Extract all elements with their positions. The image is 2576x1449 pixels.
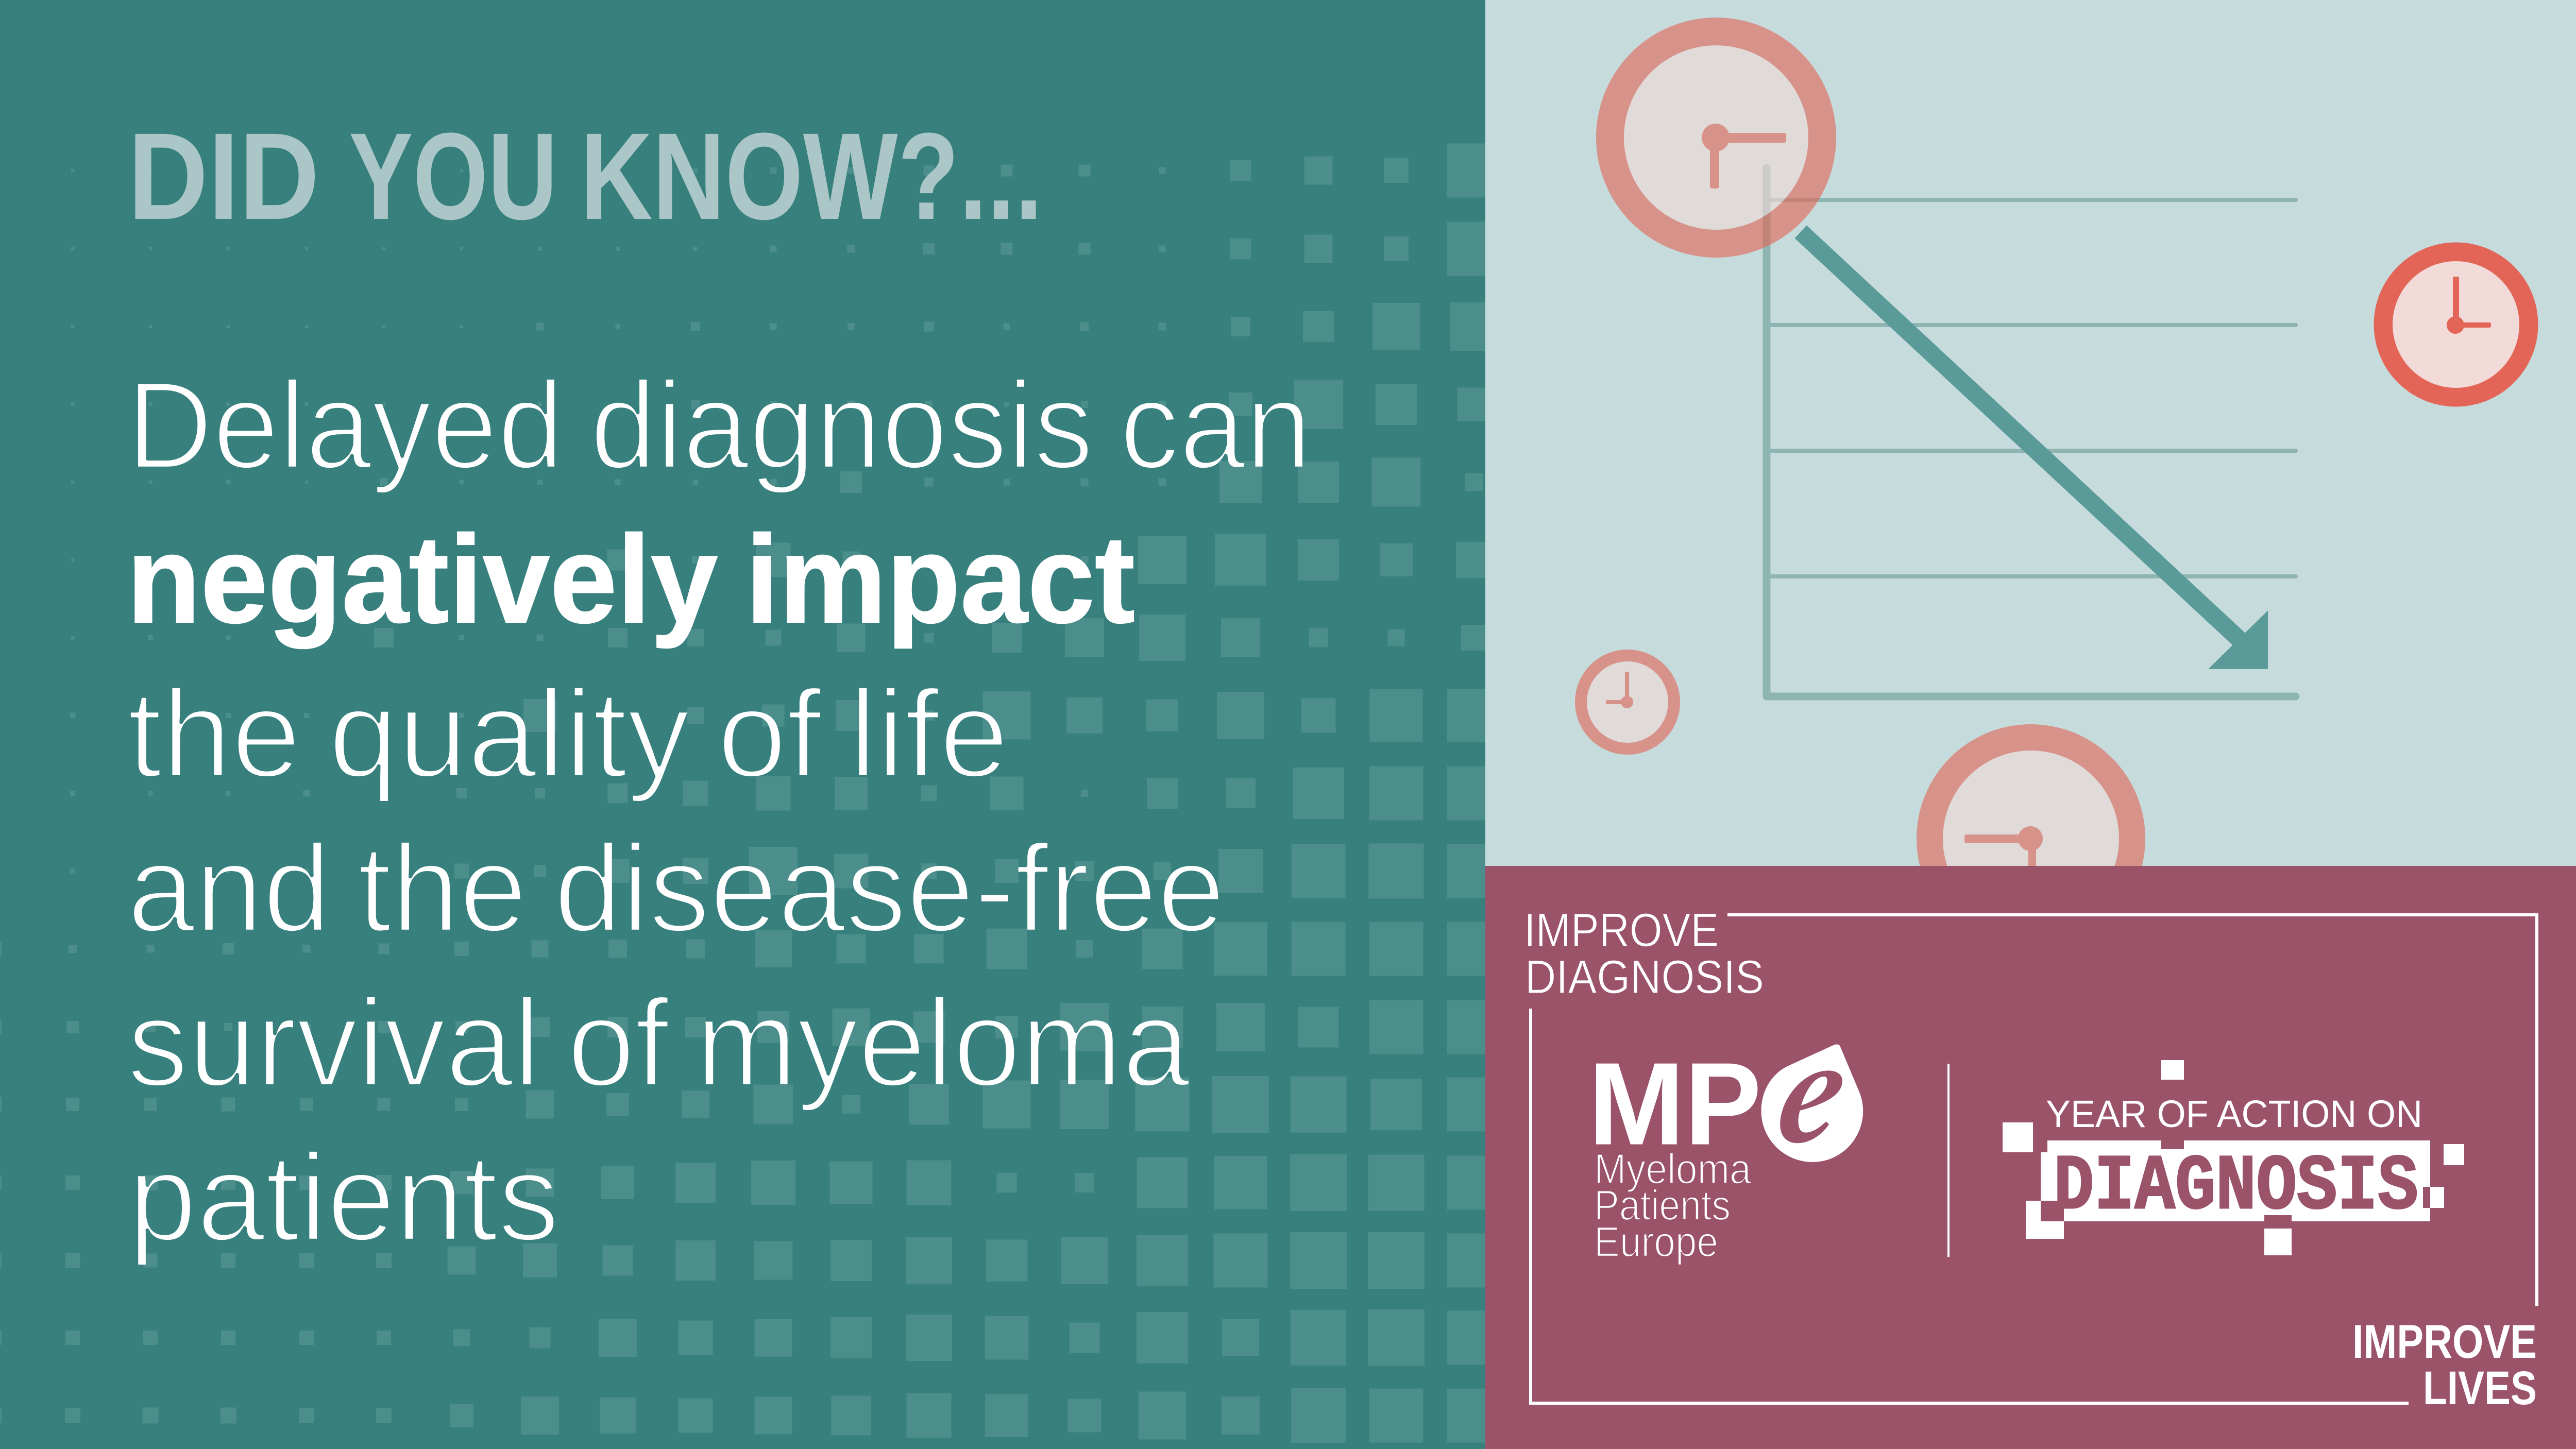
diagnosis: DIAGNOSIS bbox=[1525, 951, 1764, 1003]
logo letters MP: MP bbox=[1588, 1038, 1761, 1169]
line 3: the quality of life bbox=[127, 664, 1009, 804]
icon: small clock left bbox=[1575, 650, 1680, 755]
logo name line 1: Myeloma bbox=[1594, 1145, 1752, 1193]
text: improve diagnosis bbox=[1524, 904, 1764, 1003]
line 4: and the disease-free bbox=[127, 819, 1225, 958]
icon: large clock top left bbox=[1596, 18, 1836, 258]
scattered pixel squares bbox=[2003, 1060, 2464, 1255]
white box bbox=[2041, 1140, 2430, 1221]
improve bold: IMPROVE bbox=[2352, 1316, 2537, 1368]
chart: axes and grid lines bbox=[1767, 168, 2296, 696]
diagnosis: DIAGNOSIS bbox=[2054, 1143, 2418, 1232]
background pattern: halftone squares bbox=[0, 171, 1474, 1416]
improve: IMPROVE bbox=[1524, 904, 1719, 957]
logo drop with e bbox=[1761, 1044, 1863, 1162]
logo: year of action on diagnosis bbox=[2003, 1060, 2464, 1255]
arrow: downward trend bbox=[1801, 232, 2268, 669]
heading: did you know bbox=[128, 107, 1043, 245]
line 1: Delayed diagnosis can bbox=[127, 356, 1312, 495]
heading word 1: DID bbox=[128, 107, 319, 245]
text: improve lives bbox=[2352, 1316, 2537, 1414]
line 6: patients bbox=[128, 1128, 560, 1267]
logo name line 2: Patients bbox=[1594, 1181, 1731, 1229]
maroon pixel notch bbox=[2423, 1187, 2430, 1208]
frame: white outline bbox=[1531, 915, 2537, 1403]
heading word 2: YOU bbox=[349, 107, 557, 245]
panel: teal background bbox=[0, 0, 1489, 1449]
icon: clock bottom centre bbox=[1917, 724, 2145, 953]
text block: main message bbox=[127, 356, 1312, 1267]
heading word 3: KNOW?... bbox=[580, 107, 1043, 245]
year of action on: YEAR OF ACTION ON bbox=[2046, 1093, 2422, 1135]
logo: Myeloma Patients Europe bbox=[1588, 1038, 1863, 1266]
icon: clock right bbox=[2374, 242, 2538, 407]
logo name line 3: Europe bbox=[1594, 1218, 1718, 1266]
panel: maroon footer bbox=[1485, 866, 2576, 1449]
divider between logos bbox=[1947, 1064, 1950, 1257]
line 2 bold: negatively impact bbox=[127, 510, 1135, 649]
lives bold: LIVES bbox=[2423, 1362, 2537, 1414]
panel: chart illustration background bbox=[1485, 0, 2576, 868]
line 5: survival of myeloma bbox=[127, 974, 1190, 1113]
